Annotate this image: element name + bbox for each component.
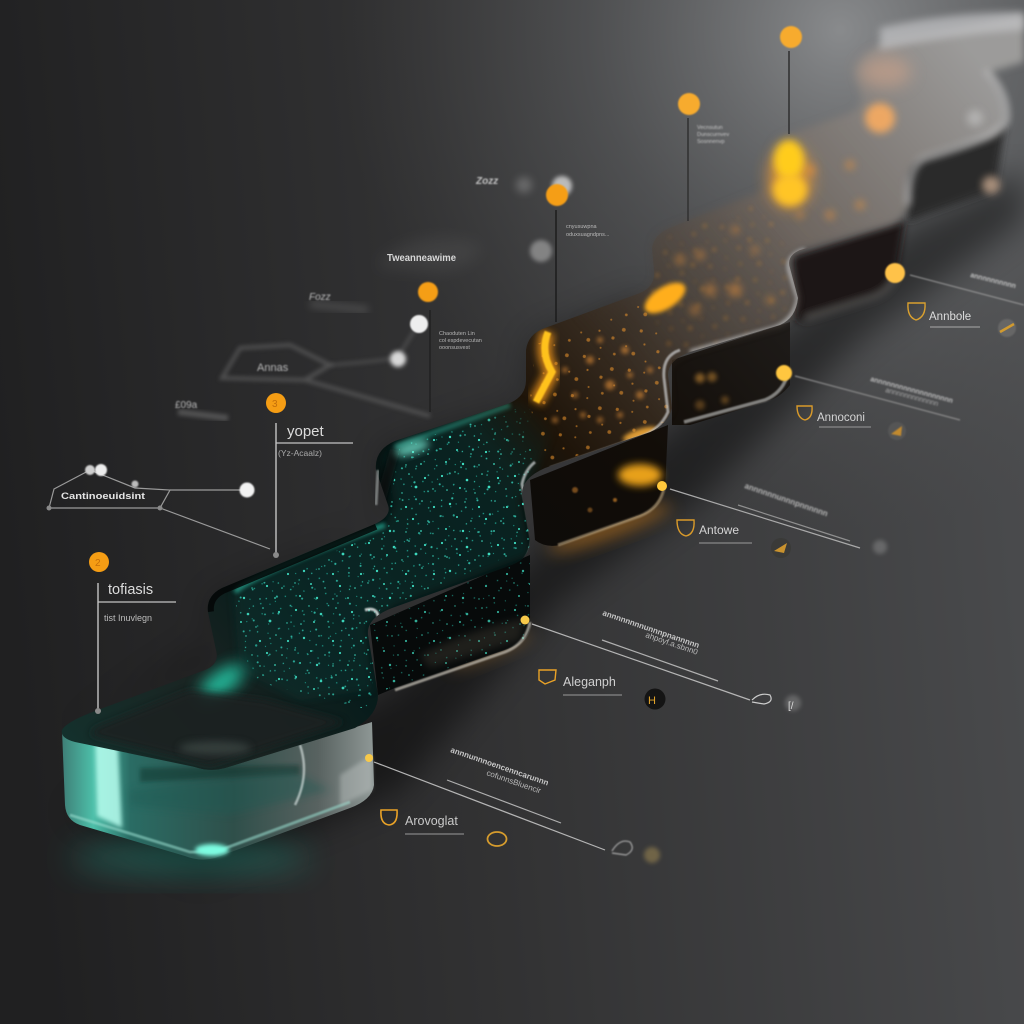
teal glowing edges [235,525,385,592]
upper-left callout: step 2 marker: tofiasis [108,582,153,598]
node: bottom-right connector 3 [657,481,887,558]
timeline marker 7 [780,26,802,134]
blurred constellation: annas [222,315,430,416]
blurred label: title [378,238,480,272]
timeline marker 6: Dunscurnvev [697,132,729,138]
icon: label 2 shield [539,670,556,684]
node: bottom-right connector 2 [520,608,801,712]
ribbon shadow and glows [60,170,1024,875]
node: bottom-right connector 2: annnnnnnnunnnpnannnnn [601,608,701,650]
icon: label 5 shield [908,303,925,320]
blurred label: title: Tweanneawime [387,252,456,264]
label 1: Arovoglat [405,814,458,828]
timeline marker 6 [678,93,729,221]
node: bottom-right connector 4: annnnnnnnnnnnn [884,387,939,408]
icon: label 5 badge [998,319,1016,337]
blurred label: Zozz: Zozz [475,176,498,187]
icon: label 2 badge: H [648,695,656,707]
label 5: Annbole [929,311,971,323]
node: bottom-right connector 2: [/ [788,701,794,712]
node: bottom-right connector 2: ahpoyf.a.sbnn0 [644,630,700,657]
label 4: Annoconi [817,412,865,424]
icon: label 3 shield [677,520,694,536]
node: bottom-right connector 1 [365,745,660,863]
blurred label: top-left small [175,400,228,418]
node: bottom-right connector 3: annnnnnunnnpnnnnnn [743,481,829,518]
ribbon top surface [62,15,1024,770]
timeline marker 5 [530,176,610,322]
upper-left callout: step 2 marker: 2 [95,558,101,569]
timeline marker 4 [418,282,482,412]
timeline marker 5: oduxsuagndpns... [566,232,610,238]
ribbon near side walls [370,322,790,695]
icon: label 4 badge [888,422,906,440]
upper-left callout: step 3 marker [266,393,353,558]
glass edge highlights [364,606,380,617]
blurred label: top-left small: £09a [175,400,198,411]
glass base block [62,722,374,860]
icon: label 3 badge [771,538,791,558]
amber particle field [530,306,668,460]
node: bottom-right connector 4: annnnnnnnnnnnnnnnnnn [869,376,954,405]
icon: label 2 badge [644,688,666,710]
label 3: Antowe [699,523,739,537]
constellation label [46,464,270,549]
teal particle field [90,160,865,765]
constellation label: Cantinoeuidsint [61,491,145,501]
icon: label 1 shield [381,810,397,825]
node: bottom-right connector 5 [885,263,1024,337]
timeline marker 5: cnyusuwpna [566,224,598,230]
blurred label: Fozz [309,292,368,310]
timeline marker 4: Chaoduten Lin [439,331,475,337]
timeline marker 4: ooonsusvest [439,345,470,351]
node: bottom-right connector 4 [776,365,960,440]
upper-left callout: step 2 marker: tist Inuvlegn [104,613,152,623]
label 2: Aleganph [563,675,616,689]
icon: label 4 shield [797,406,812,420]
timeline marker 6: Sosnnenvp [697,139,725,145]
amber glowing edges [536,332,552,402]
upper-left callout: step 2 marker [89,552,176,714]
upper-left callout: step 3 marker: (Yz-Acaalz) [278,448,322,458]
node: bottom-right connector 1: annnunnnoencenncarunnn [449,745,550,787]
icon: label 1 ring [488,832,506,846]
glass highlight at inner notch [376,470,378,505]
node: bottom-right connector 1: cofunnsBluencir [485,768,542,796]
node: bottom-right connector 5: annnnnnnnnn [970,272,1016,290]
timeline marker 6: Vecnsutun [697,125,723,131]
blurred label: Fozz: Fozz [309,292,331,303]
ribbon far side walls [792,125,1005,322]
timeline marker 4: col espdevecutan [439,338,482,344]
upper-left callout: step 3 marker: yopet [287,423,325,440]
upper-left callout: step 3 marker: 3 [272,399,278,410]
blurred constellation: annas: Annas [257,362,289,374]
blurred far end of ribbon [768,12,1024,208]
blurred label: Zozz [475,176,532,193]
